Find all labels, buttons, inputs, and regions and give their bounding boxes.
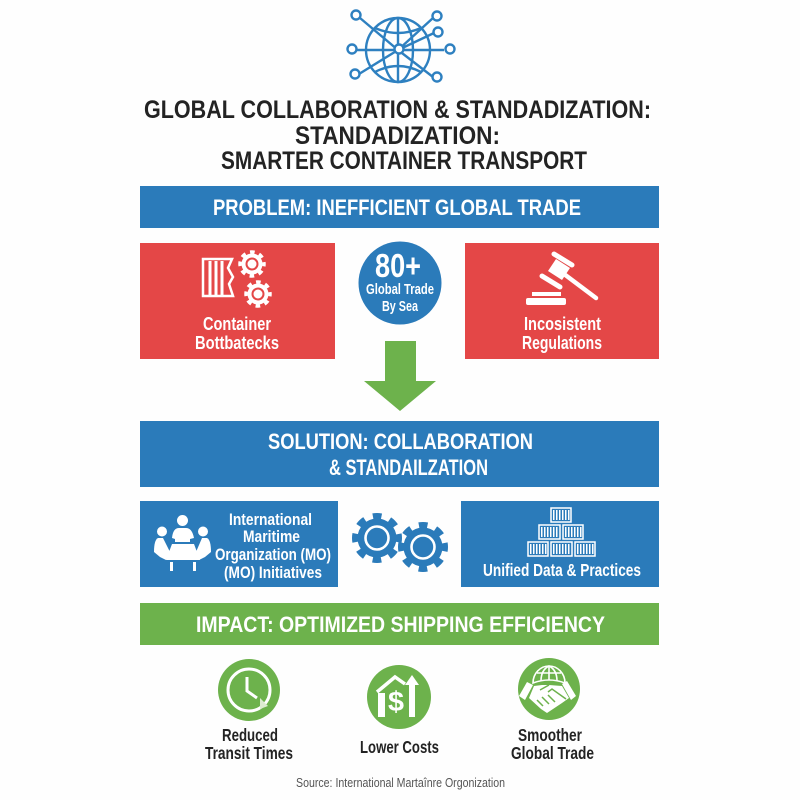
impact item: smoother global trade [511,658,594,763]
impact item: reduced transit times [205,659,293,763]
title: STANDADIZATION: [295,122,500,150]
label: IMO initiatives [215,511,331,582]
label: reduced transit times [205,725,293,763]
icon: dollar with arrows: $ [388,686,404,717]
label: IMO initiatives: Maritime [243,528,300,546]
label: IMO initiatives: (MO) Initiatives [224,564,322,582]
title [144,96,651,175]
panel: inconsistent regulations [465,243,659,359]
label: IMO initiatives: Organization (MO) [215,546,331,564]
label: inconsistent regulations: Regulations [522,332,602,353]
banner: solution: & STANDAILZATION [329,455,488,480]
label: lower costs: Lower Costs [360,737,439,757]
label: reduced transit times: Transit Times [205,743,293,763]
banner: problem [140,186,659,228]
panel: container bottlenecks [140,243,335,359]
title: GLOBAL COLLABORATION & STANDADIZATION: [144,96,651,124]
stat circle: 80+ global trade by sea: Global Trade [366,281,434,298]
icon: people at table [154,515,211,571]
title: SMARTER CONTAINER TRANSPORT [221,147,587,175]
label: inconsistent regulations: Incosistent [524,313,601,334]
banner: impact [140,603,659,645]
icon: networked globe [348,10,454,82]
impact item: lower costs [360,665,439,757]
source note: Source: International Martaînre Orgonization [296,776,505,790]
panel: unified data and practices [461,501,659,587]
panel: IMO initiatives [140,501,338,587]
label: IMO initiatives: International [229,511,312,529]
label: container bottlenecks: Container [203,313,271,334]
icon: gavel [526,254,596,305]
label: container bottlenecks [195,313,279,353]
icon: damaged container and gears [203,252,270,306]
label: smoother global trade [511,725,594,763]
label: smoother global trade: Global Trade [511,743,594,763]
stat circle: 80+ global trade by sea: By Sea [382,298,418,315]
label: inconsistent regulations [522,313,602,353]
arrow: problem to solution [364,341,436,411]
banner: solution [140,421,659,487]
label: unified data and practices: Unified Data & Practices [483,560,641,580]
icon: stacked containers [528,508,595,556]
stat circle: 80+ global trade by sea [358,242,442,324]
label: smoother global trade: Smoother [518,725,582,745]
label: reduced transit times: Reduced [222,725,278,745]
icon: clock [218,659,280,721]
label: container bottlenecks: Bottbatecks [195,332,279,353]
stat circle: 80+ global trade by sea: 80+ [375,247,421,284]
icon: interlocking gears [356,516,444,568]
banner: impact: IMPACT: OPTIMIZED SHIPPING EFFICIENCY [196,612,605,637]
banner: solution: SOLUTION: COLLABORATION [268,429,533,454]
banner: problem: PROBLEM: INEFFICIENT GLOBAL TRADE [213,195,581,220]
icon: globe and handshake [518,658,580,720]
